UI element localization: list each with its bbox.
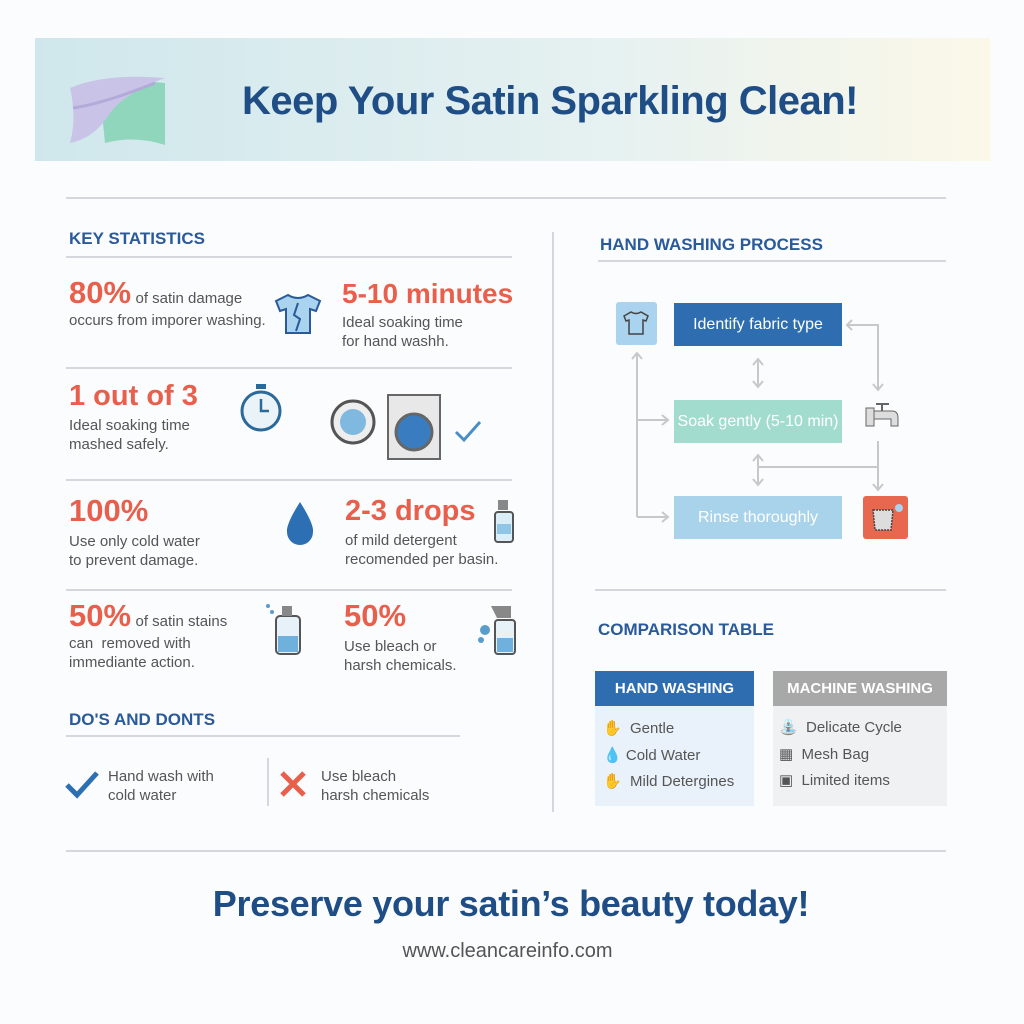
- step: soak: [674, 400, 842, 443]
- icon: spray bottle: [494, 500, 514, 543]
- step: identify: [674, 303, 842, 346]
- stat 50% bleach: Use bleach or: [344, 638, 437, 655]
- do item: Hand wash with: [108, 768, 214, 785]
- do item: cold water: [108, 787, 176, 804]
- stat 50% stains: 50% of satin stains: [69, 598, 227, 633]
- icon: faucet: [866, 403, 898, 426]
- stat 80%: [69, 275, 266, 329]
- arrows: [631, 319, 884, 523]
- stat 80%: 80% of satin damage: [69, 275, 242, 310]
- dont item: harsh chemicals: [321, 787, 429, 804]
- table: hand washing: [595, 671, 754, 806]
- heading: hand washing process: HAND WASHING PROCESS: [600, 235, 823, 254]
- stat 50% stains: [69, 598, 227, 671]
- icon: basket: [863, 496, 908, 539]
- icon: torn shirt: [274, 294, 322, 334]
- stat 50% stains: can removed with: [69, 635, 191, 652]
- stat 100%: [69, 493, 200, 569]
- icon: shirt box: [616, 302, 657, 345]
- table: hand washing: ✋ Mild Detergines: [603, 773, 734, 790]
- stat 50% bleach: [344, 598, 457, 674]
- icon: water drop: [286, 502, 314, 545]
- title: Keep Your Satin Sparkling Clean!: [242, 79, 858, 123]
- icon: satin fabric: [70, 76, 165, 145]
- stat 5-10 minutes: for hand washh.: [342, 333, 449, 350]
- stat 2-3 drops: recomended per basin.: [345, 551, 498, 568]
- dont item: Use bleach: [321, 768, 396, 785]
- stat 100%: 100%: [69, 493, 148, 528]
- stat 2-3 drops: [345, 495, 498, 568]
- table: machine washing: ▦ Mesh Bag: [779, 746, 869, 763]
- icon: spray: [478, 606, 516, 655]
- stat 2-3 drops: 2-3 drops: [345, 495, 476, 527]
- stat 5-10 minutes: 5-10 minutes: [342, 278, 513, 309]
- do item: [65, 768, 214, 804]
- icon: detergent bottle: [266, 604, 301, 655]
- dont item: [280, 768, 429, 804]
- stat 50% bleach: 50%: [344, 598, 406, 633]
- step: rinse: [674, 496, 842, 539]
- step: soak: Soak gently (5-10 min): [678, 412, 838, 430]
- stat 1 out of 3: Ideal soaking time: [69, 417, 190, 434]
- table: machine washing: ▣ Limited items: [779, 772, 890, 789]
- stat 1 out of 3: mashed safely.: [69, 436, 169, 453]
- table: hand washing: HAND WASHING: [615, 680, 734, 697]
- table: hand washing: ✋ Gentle: [603, 720, 674, 737]
- header banner: [35, 38, 990, 161]
- stat 2-3 drops: of mild detergent: [345, 532, 457, 549]
- table: machine washing: [773, 671, 947, 806]
- icon: washing machines: [330, 394, 481, 460]
- table: machine washing: ⛲ Delicate Cycle: [779, 719, 902, 736]
- footer url: www.cleancareinfo.com: [402, 940, 613, 962]
- stat 50% stains: immediante action.: [69, 654, 195, 671]
- stat 50% bleach: harsh chemicals.: [344, 657, 457, 674]
- flow chart: [631, 319, 884, 523]
- stat 100%: Use only cold water: [69, 533, 200, 550]
- heading: dos and donts: DO'S AND DONTS: [69, 710, 215, 729]
- step: identify: Identify fabric type: [693, 316, 823, 332]
- icon: stopwatch: [240, 384, 282, 432]
- heading: key statistics: KEY STATISTICS: [69, 229, 205, 248]
- stat 100%: to prevent damage.: [69, 552, 198, 569]
- stat 1 out of 3: 1 out of 3: [69, 380, 198, 412]
- heading: comparison table: COMPARISON TABLE: [598, 620, 774, 639]
- stat 80%: occurs from imporer washing.: [69, 312, 266, 329]
- table: machine washing: MACHINE WASHING: [787, 680, 933, 697]
- stat 5-10 minutes: Ideal soaking time: [342, 314, 463, 331]
- stat 1 out of 3: [69, 380, 198, 453]
- step: rinse: Rinse thoroughly: [698, 508, 818, 526]
- table: hand washing: 💧 Cold Water: [603, 747, 700, 764]
- footer tagline: Preserve your satin’s beauty today!: [213, 883, 809, 924]
- stat 5-10 minutes: [342, 278, 513, 350]
